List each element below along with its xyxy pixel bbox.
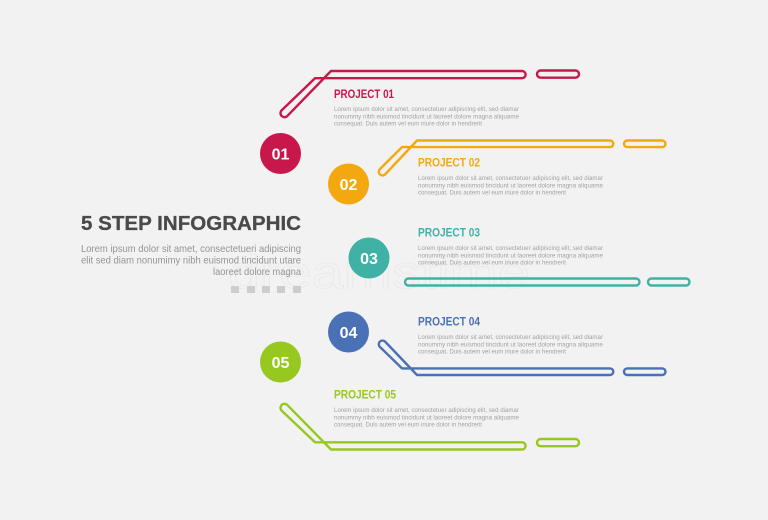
title: 5 STEP INFOGRAPHIC [81,212,301,235]
body text 01: Lorem ipsum dolor sit amet, consectetuer adipiscing elit, sed diamar [334,106,519,113]
body text 04 [418,334,603,356]
body text 05: consequat. Duis autem vel eum iriure dolor in hendrerit [334,422,482,429]
body text 01 [334,106,519,128]
number badge 05: 05 [272,355,290,372]
body text 05: nonummy nibh euismod tincidunt ut laoreet dolore magna aliquame [334,414,519,421]
description text block: Lorem ipsum dolor sit amet, consectetueri adipiscing [81,244,301,255]
body text 04: Lorem ipsum dolor sit amet, consectetuer adipiscing elit, sed diamar [418,334,603,341]
number badge 02 [328,164,369,204]
number badge 02: 02 [340,177,358,194]
arrow outline 01 [280,71,526,117]
pill 03 [648,278,690,286]
panel: project 05 [260,342,579,450]
number badge 01 [260,133,301,174]
pill 05 [537,439,579,446]
body text 04: nonummy nibh euismod tincidunt ut laoreet dolore magna aliquame [418,341,603,348]
panel: project 01 [260,70,579,174]
arrow outline 02 [379,140,613,175]
heading 02: PROJECT 02 [418,158,480,170]
heading 01: PROJECT 01 [334,89,395,101]
heading 03: PROJECT 03 [418,228,480,240]
number badge 03 [348,238,390,278]
number badge 01: 01 [272,146,290,163]
pill bar 03 [405,278,640,286]
panel: project 03 [348,228,690,286]
description text block: laoreet dolore magna [213,267,301,278]
number badge 05 [260,342,301,382]
body text 02 [418,175,603,197]
body text 02: nonummy nibh euismod tincidunt ut laoreet dolore magna aliquame [418,182,603,189]
arrow outline 04 [379,341,613,375]
pill 04 [624,368,666,375]
heading 05: PROJECT 05 [334,390,397,402]
body text 03: nonummy nibh euismod tincidunt ut laoreet dolore magna aliquame [418,252,603,259]
pill 01 [537,70,579,78]
number badge 04 [328,312,369,352]
body text 03: Lorem ipsum dolor sit amet, consectetuer adipiscing elit, sed diamar [418,245,603,252]
body text 05: Lorem ipsum dolor sit amet, consectetuer adipiscing elit, sed diamar [334,407,519,414]
description text block: elit sed diam nonumimy nibh euismod tincidunt utare [81,255,301,266]
body text 01: consequat. Duis autem vel eum iriure dolor in hendrerit [334,121,482,128]
body text 02: Lorem ipsum dolor sit amet, consectetuer adipiscing elit, sed diamar [418,175,603,182]
panel: project 04 [328,312,666,375]
number badge 03: 03 [360,251,378,268]
body text 03: consequat. Duis autem vel eum iriure dolor in hendrerit [418,260,566,267]
arrow outline 05 [280,404,526,450]
pagination squares [231,286,301,293]
body text 02: consequat. Duis autem vel eum iriure dolor in hendrerit [418,190,566,197]
panel: project 02 [328,140,666,204]
watermark: dreamstime [228,246,530,298]
body text 01: nonummy nibh euismod tincidunt ut laoreet dolore magna aliquame [334,113,519,120]
number badge 04: 04 [340,325,358,342]
body text 05 [334,407,519,429]
body text 04: consequat. Duis autem vel eum iriure dolor in hendrerit [418,349,566,356]
body text 03 [418,245,603,267]
description text block [81,244,301,278]
pill 02 [624,140,666,147]
heading 04: PROJECT 04 [418,316,481,328]
